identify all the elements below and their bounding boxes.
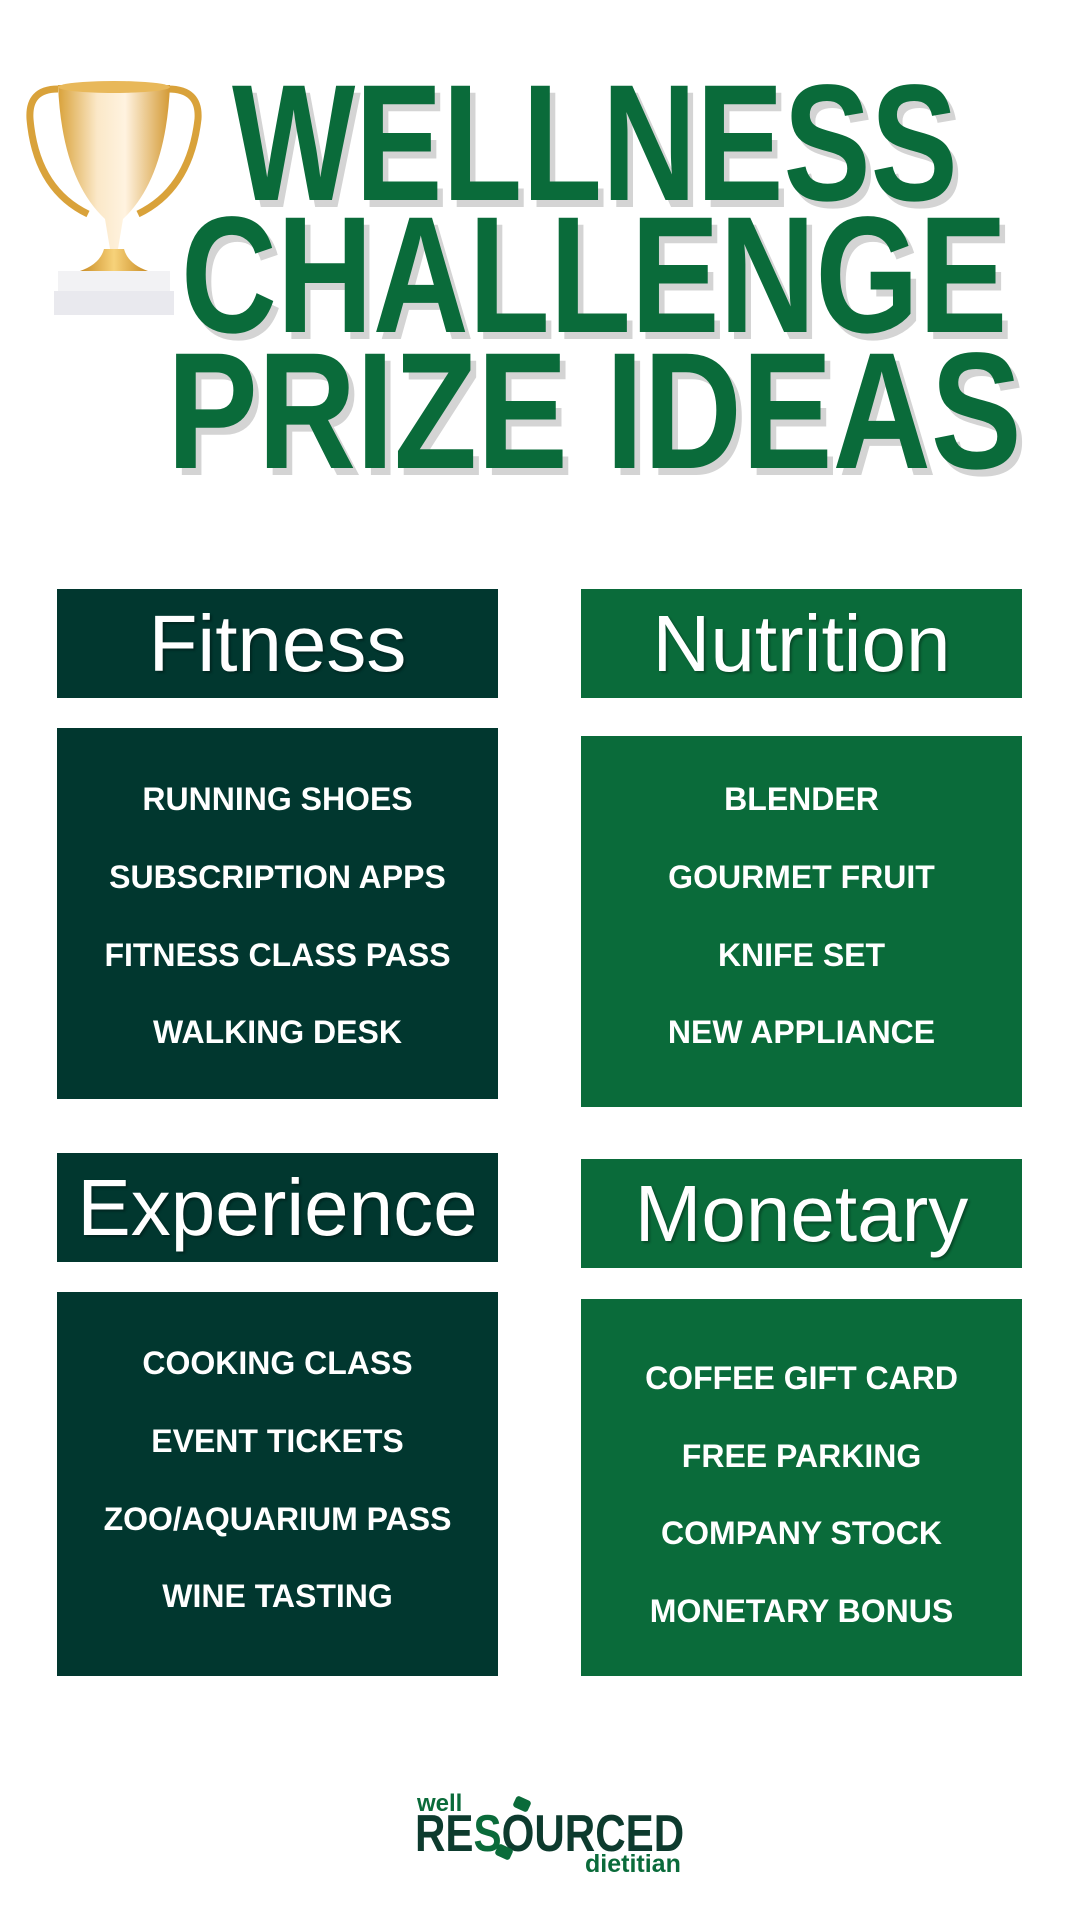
panel: experience items: COOKING CLASS — [142, 1345, 413, 1381]
panel: monetary items: COFFEE GIFT CARD — [645, 1360, 958, 1396]
logo: dietitian — [585, 1850, 681, 1878]
heading: Nutrition — [581, 589, 1022, 698]
heading: Experience: Experience — [77, 1163, 478, 1252]
title: PRIZE IDEAS — [167, 319, 1022, 504]
panel: experience items: WINE TASTING — [162, 1578, 393, 1614]
panel: monetary items — [581, 1299, 1022, 1676]
title: WELLNESS — [232, 51, 958, 236]
heading: Monetary — [581, 1159, 1022, 1268]
panel: experience items: EVENT TICKETS — [151, 1423, 404, 1459]
panel: experience items — [57, 1292, 498, 1676]
panel: monetary items: COMPANY STOCK — [661, 1515, 942, 1551]
panel: fitness items: SUBSCRIPTION APPS — [109, 859, 446, 895]
logo — [415, 1790, 684, 1878]
panel: fitness items: FITNESS CLASS PASS — [104, 937, 451, 973]
panel: nutrition items: KNIFE SET — [718, 937, 885, 973]
icon: trophy — [26, 81, 202, 315]
panel: nutrition items: NEW APPLIANCE — [668, 1014, 935, 1050]
heading: Fitness — [57, 589, 498, 698]
panel: nutrition items — [581, 736, 1022, 1107]
heading: Monetary: Monetary — [635, 1169, 968, 1258]
panel: fitness items — [57, 728, 498, 1099]
panel: monetary items: MONETARY BONUS — [650, 1593, 953, 1629]
panel: fitness items: WALKING DESK — [153, 1014, 402, 1050]
logo: RESOURCED — [415, 1805, 684, 1863]
logo: well — [417, 1790, 462, 1817]
heading: Fitness: Fitness — [149, 599, 406, 688]
panel: experience items: ZOO/AQUARIUM PASS — [104, 1501, 451, 1537]
heading: Nutrition: Nutrition — [653, 599, 950, 688]
icon: money bills — [495, 1796, 531, 1860]
title — [167, 51, 1022, 504]
panel: monetary items: FREE PARKING — [682, 1438, 921, 1474]
panel: fitness items: RUNNING SHOES — [142, 781, 413, 817]
title: CHALLENGE — [181, 183, 1007, 368]
panel: nutrition items: BLENDER — [724, 781, 879, 817]
panel: nutrition items: GOURMET FRUIT — [668, 859, 935, 895]
